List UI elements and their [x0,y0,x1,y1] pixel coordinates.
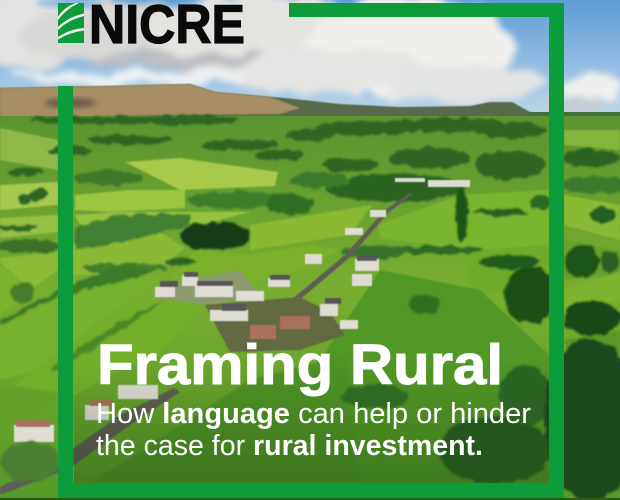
village houses and lane [0,178,470,495]
icon: green square with curved white stripes [58,3,84,43]
title: Framing Rural [97,333,503,397]
hedgerows and woodland [0,115,620,372]
distant hills [0,84,620,142]
sky with clouds [0,0,620,125]
NICRE logo [58,0,245,55]
subtitle [96,398,531,462]
patchwork of fields [0,116,620,500]
foreground trees and shade [0,338,620,500]
subtitle: How language can help or hinder [96,398,531,430]
subtitle: the case for rural investment. [96,430,483,462]
